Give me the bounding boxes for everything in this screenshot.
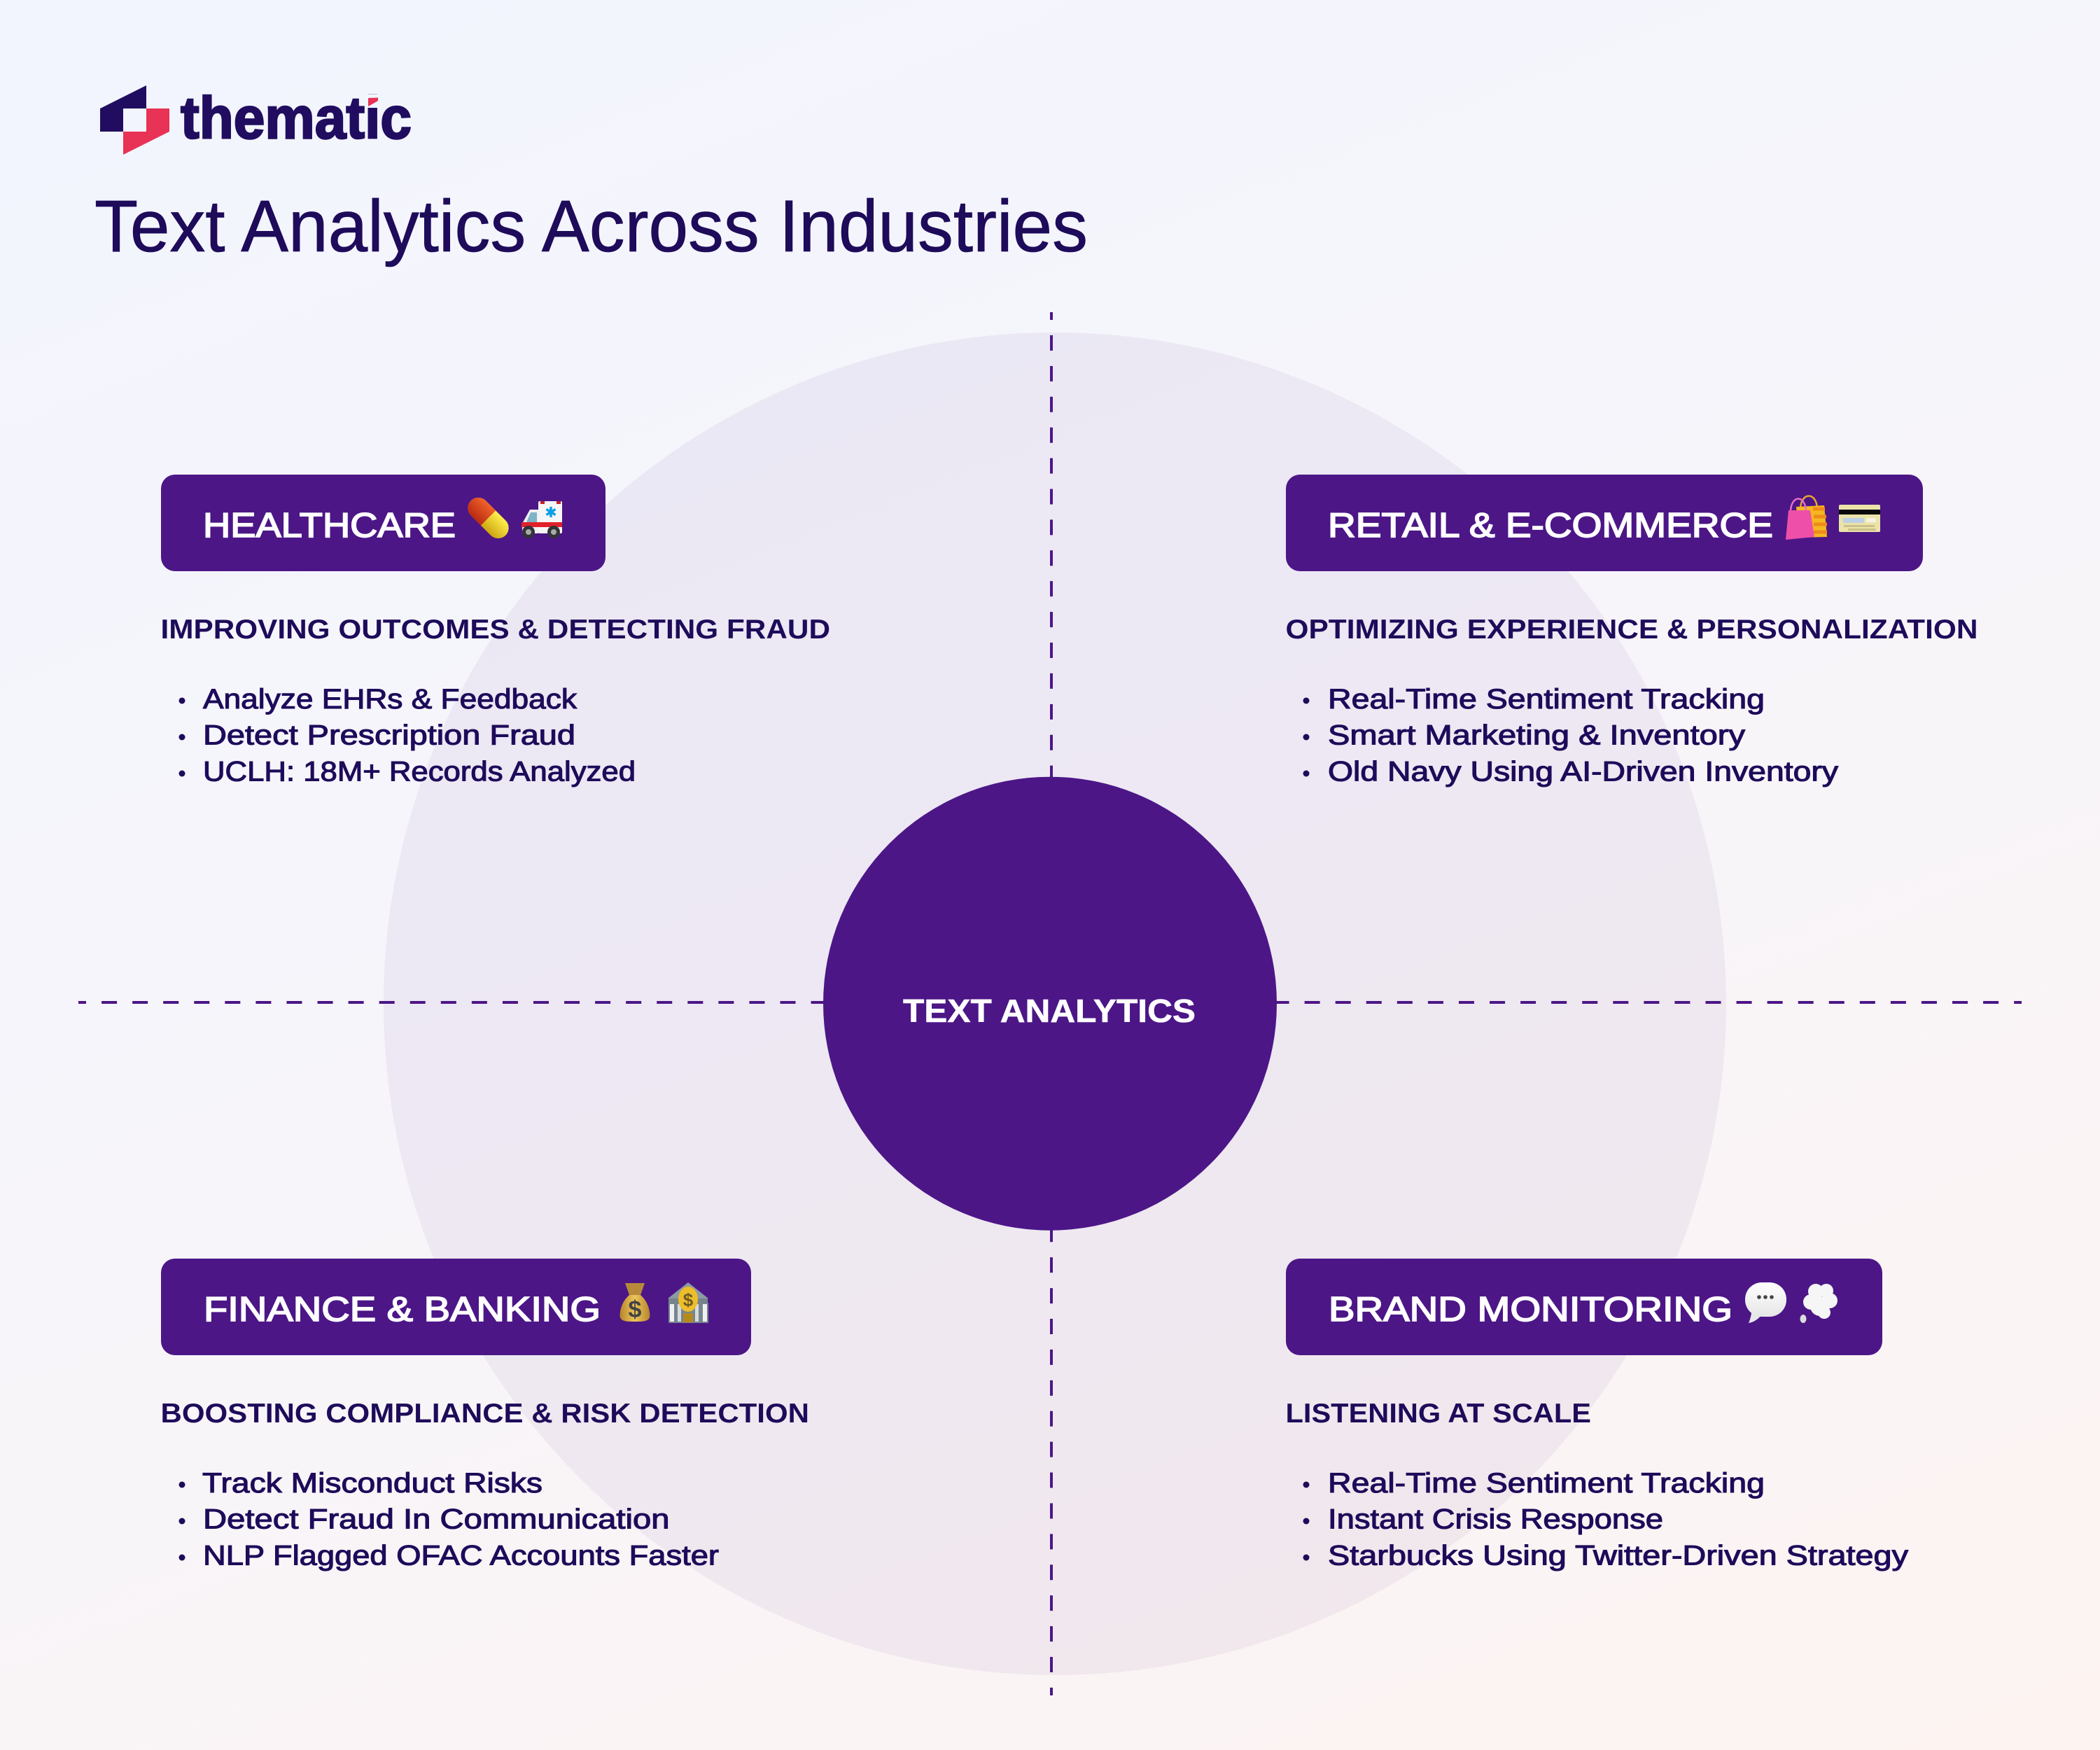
vertical dashed axis	[1050, 312, 1053, 1695]
icon: bank	[668, 1282, 708, 1323]
bullet list: retail and e-commerce	[1303, 684, 1838, 787]
logo mark	[100, 85, 169, 155]
icon: shopping bags	[1786, 496, 1827, 540]
icon: money bag: $	[629, 1296, 642, 1323]
panel: retail and e-commerce	[1285, 475, 1978, 787]
center hub: text analytics	[823, 777, 1277, 1231]
bullet list: healthcare: Detect Prescription Fraud	[203, 720, 575, 750]
icon: speech bubble	[1745, 1282, 1786, 1323]
icon: pill	[463, 493, 513, 542]
bullet list: brand monitoring	[1303, 1468, 1908, 1571]
badge: finance and banking	[161, 1259, 751, 1355]
badge: retail and e-commerce	[1286, 475, 1923, 571]
bullet list: healthcare: UCLH: 18M+ Records Analyzed	[203, 756, 636, 787]
subheading: finance and banking: BOOSTING COMPLIANCE & RISK DETECTION	[161, 1399, 809, 1429]
subheading: healthcare: IMPROVING OUTCOMES & DETECTING FRAUD	[161, 615, 830, 645]
bullet list: healthcare	[179, 684, 636, 787]
bullet list: finance and banking: Track Misconduct Risks	[202, 1468, 542, 1499]
horizontal dashed axis	[78, 1001, 2022, 1004]
icon: bank: $	[683, 1289, 694, 1310]
large background circle	[384, 332, 1726, 1675]
bullet list: finance and banking	[179, 1468, 719, 1571]
bullet list: brand monitoring: Real-Time Sentiment Tracking	[1328, 1468, 1765, 1499]
logo: thematic	[100, 85, 412, 155]
subheading: retail and e-commerce: OPTIMIZING EXPERIENCE & PERSONALIZATION	[1285, 615, 1978, 645]
subheading: brand monitoring: LISTENING AT SCALE	[1285, 1399, 1591, 1429]
badge: healthcare: HEALTHCARE	[203, 507, 456, 545]
icon: money bag	[620, 1283, 650, 1323]
icon: ambulance	[522, 501, 562, 538]
panel: brand monitoring	[1285, 1259, 1908, 1571]
badge: retail and e-commerce: RETAIL & E-COMMERCE	[1328, 507, 1773, 545]
title: Text Analytics Across Industries	[94, 186, 1088, 267]
badge: finance and banking: FINANCE & BANKING	[204, 1291, 601, 1329]
badge: healthcare	[161, 475, 606, 571]
bullet list: retail and e-commerce: Smart Marketing & Inventory	[1328, 720, 1745, 750]
panel: finance and banking	[161, 1259, 809, 1571]
center hub: text analytics: TEXT ANALYTICS	[903, 993, 1196, 1029]
bullet list: healthcare: Analyze EHRs & Feedback	[203, 684, 577, 715]
bullet list: brand monitoring: Instant Crisis Response	[1328, 1504, 1663, 1534]
bullet list: retail and e-commerce: Old Navy Using AI-Driven Inventory	[1328, 756, 1838, 787]
panel: healthcare	[161, 475, 830, 787]
bullet list: brand monitoring: Starbucks Using Twitter-Driven Strategy	[1328, 1540, 1908, 1571]
logo wordmark: thematic	[181, 85, 412, 151]
icon: credit card	[1839, 505, 1880, 532]
icon: thought bubble	[1800, 1284, 1837, 1323]
bullet list: retail and e-commerce: Real-Time Sentiment Tracking	[1328, 684, 1765, 715]
badge: brand monitoring	[1286, 1259, 1882, 1355]
bullet list: finance and banking: NLP Flagged OFAC Accounts Faster	[203, 1540, 719, 1571]
bullet list: finance and banking: Detect Fraud In Communication	[203, 1504, 669, 1534]
badge: brand monitoring: BRAND MONITORING	[1329, 1291, 1732, 1329]
